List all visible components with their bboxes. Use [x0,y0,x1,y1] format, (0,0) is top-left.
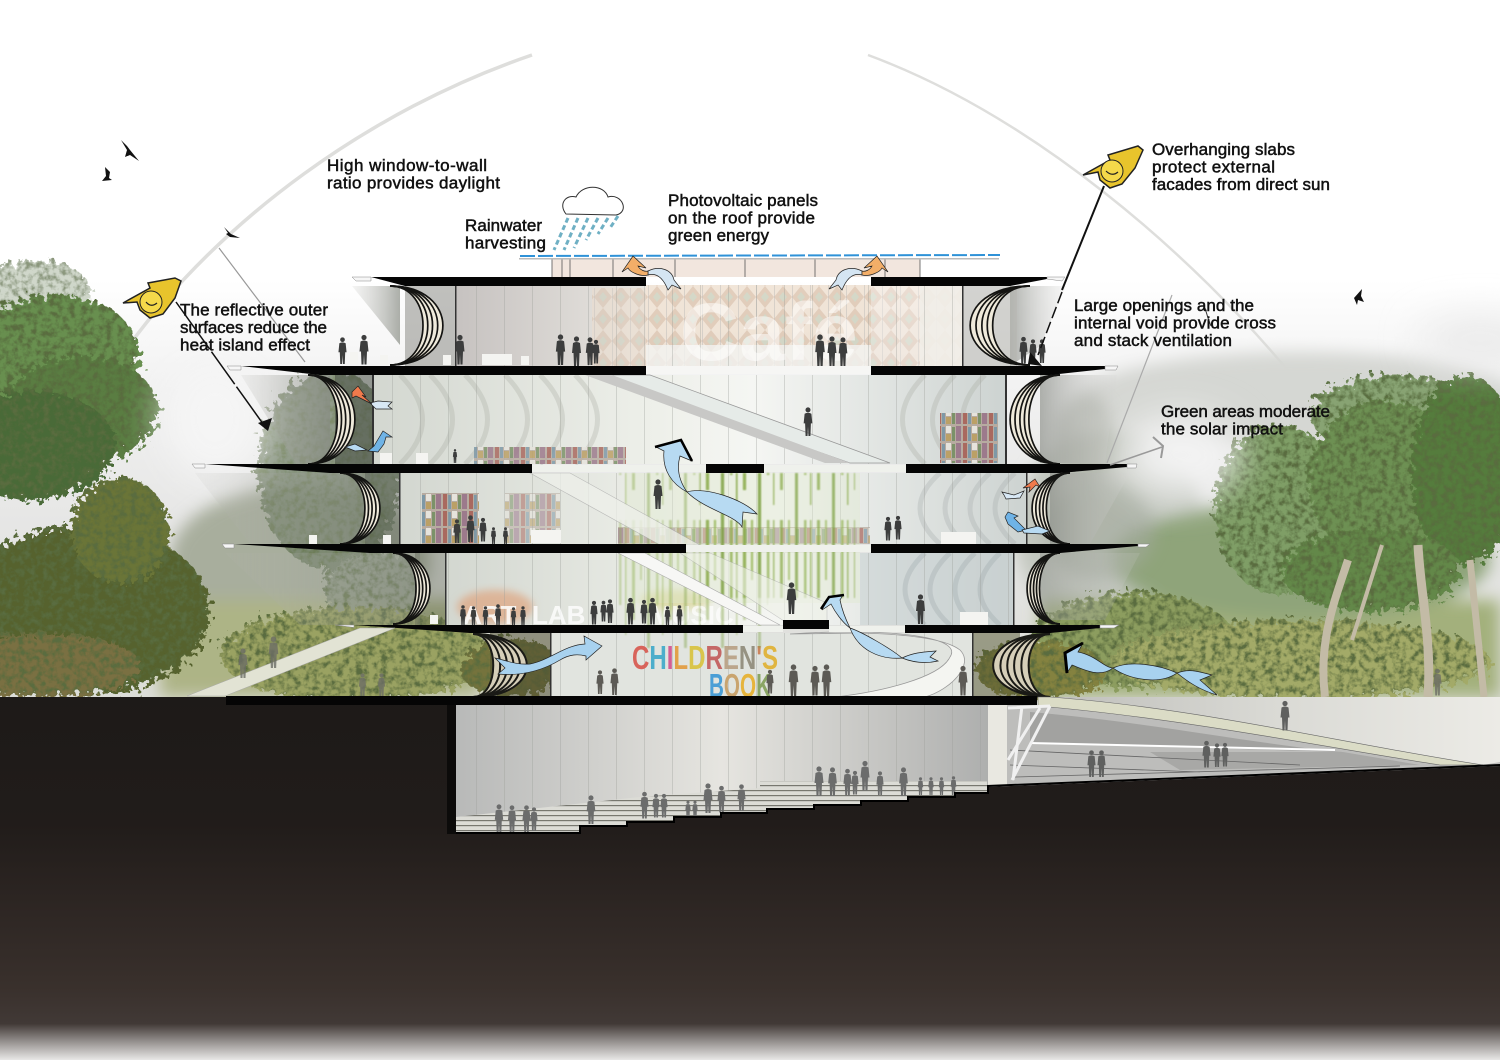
interior: second floor [399,473,1026,544]
callout: ventilation: Large openings and the [1074,296,1254,315]
white square patch in sky [1455,140,1487,178]
callout: daylight line 2: ratio provides daylight [327,174,500,192]
callout: ventilation line 2: internal void provide cross [1074,314,1276,332]
smiling sun: right [1083,146,1143,188]
airflow arrows [345,256,1217,695]
sky background [0,0,1500,700]
callout: rainwater line 2: harvesting [465,234,546,252]
interior: first floor: MUSIC [650,600,734,630]
roof arrow left [622,256,681,290]
shaded bays behind shells [335,286,1020,697]
interior: third floor [372,375,1006,464]
curved facade shells [308,286,1070,697]
bookshelves [474,447,626,464]
people silhouettes [338,334,1046,625]
callout: reflective surfaces line 2: surfaces reduce the [180,318,327,337]
callout: photovoltaic: Photovoltaic panels [668,191,818,210]
basement hall [456,705,988,833]
diagonal stair ramps [530,375,890,625]
right tree trunks [1323,545,1484,697]
callout: photovoltaic line 2: on the roof provide [668,208,815,228]
basement crowd [495,761,956,832]
translucent wedges under slab tips [195,286,1140,625]
white furniture [309,352,988,625]
white slab tips [192,277,1150,628]
smiling sun: left [123,278,181,318]
callout: photovoltaic line 3: green energy [668,226,770,245]
right tree [1214,375,1500,612]
palm tree [0,478,210,697]
children's book lettering [632,639,778,704]
rain cloud [554,187,623,250]
callout: daylight: High window-to-wall [327,156,487,175]
entrance ramp and truss [988,697,1500,786]
ground arrow right [1065,643,1217,695]
interior: first floor [445,553,1013,630]
children's book lettering: BOOK [709,667,771,704]
ramp visitors [1087,701,1290,777]
callout: overhanging slabs line 3: facades from direct sun [1152,175,1330,194]
callout: reflective surfaces: The reflective outer [180,300,328,320]
sun path arc [128,55,1300,385]
callout: rainwater: Rainwater [465,216,542,235]
ground arrow left [495,636,602,674]
roof arrow right [829,256,888,290]
ground cut [0,697,1500,1060]
interior: top floor [455,285,962,378]
floor slabs [205,277,1138,705]
callout: green areas line 2: the solar impact [1161,420,1283,438]
stair void arrow [822,595,938,662]
interior: ground floor [550,632,972,704]
interior: first floor: LAB [532,600,585,630]
big void arrow [656,440,757,527]
callout: green areas: Green areas moderate [1161,402,1330,421]
callout: overhanging slabs: Overhanging slabs [1152,140,1295,159]
vertical facade posts [372,285,1028,698]
callout: overhanging slabs line 2: protect external [1152,158,1275,176]
children's book lettering: CHILDREN'S [632,639,778,676]
photovoltaic panels [519,255,1000,260]
mist [165,320,1500,495]
rooftop pavilion [552,258,920,277]
facade arrows [370,401,392,409]
spiral ramp [790,632,965,697]
rain [554,216,618,250]
left tree [0,260,158,500]
hazy forest behind the building [160,352,1500,697]
central void with hanging vines [618,473,860,648]
callout: ventilation line 3: and stack ventilation [1074,331,1232,350]
interior: first floor: ART [463,600,517,630]
building section [187,255,1500,833]
cafe wall lettering: Café [680,287,858,378]
undergrowth [220,592,1490,703]
birds [102,140,1364,305]
callout: reflective surfaces line 3: heat island effect [180,336,310,354]
floor bands between slabs [532,465,906,632]
sun rays [176,186,1211,465]
terraced stairs [456,781,987,832]
left ground ramp [187,628,395,696]
